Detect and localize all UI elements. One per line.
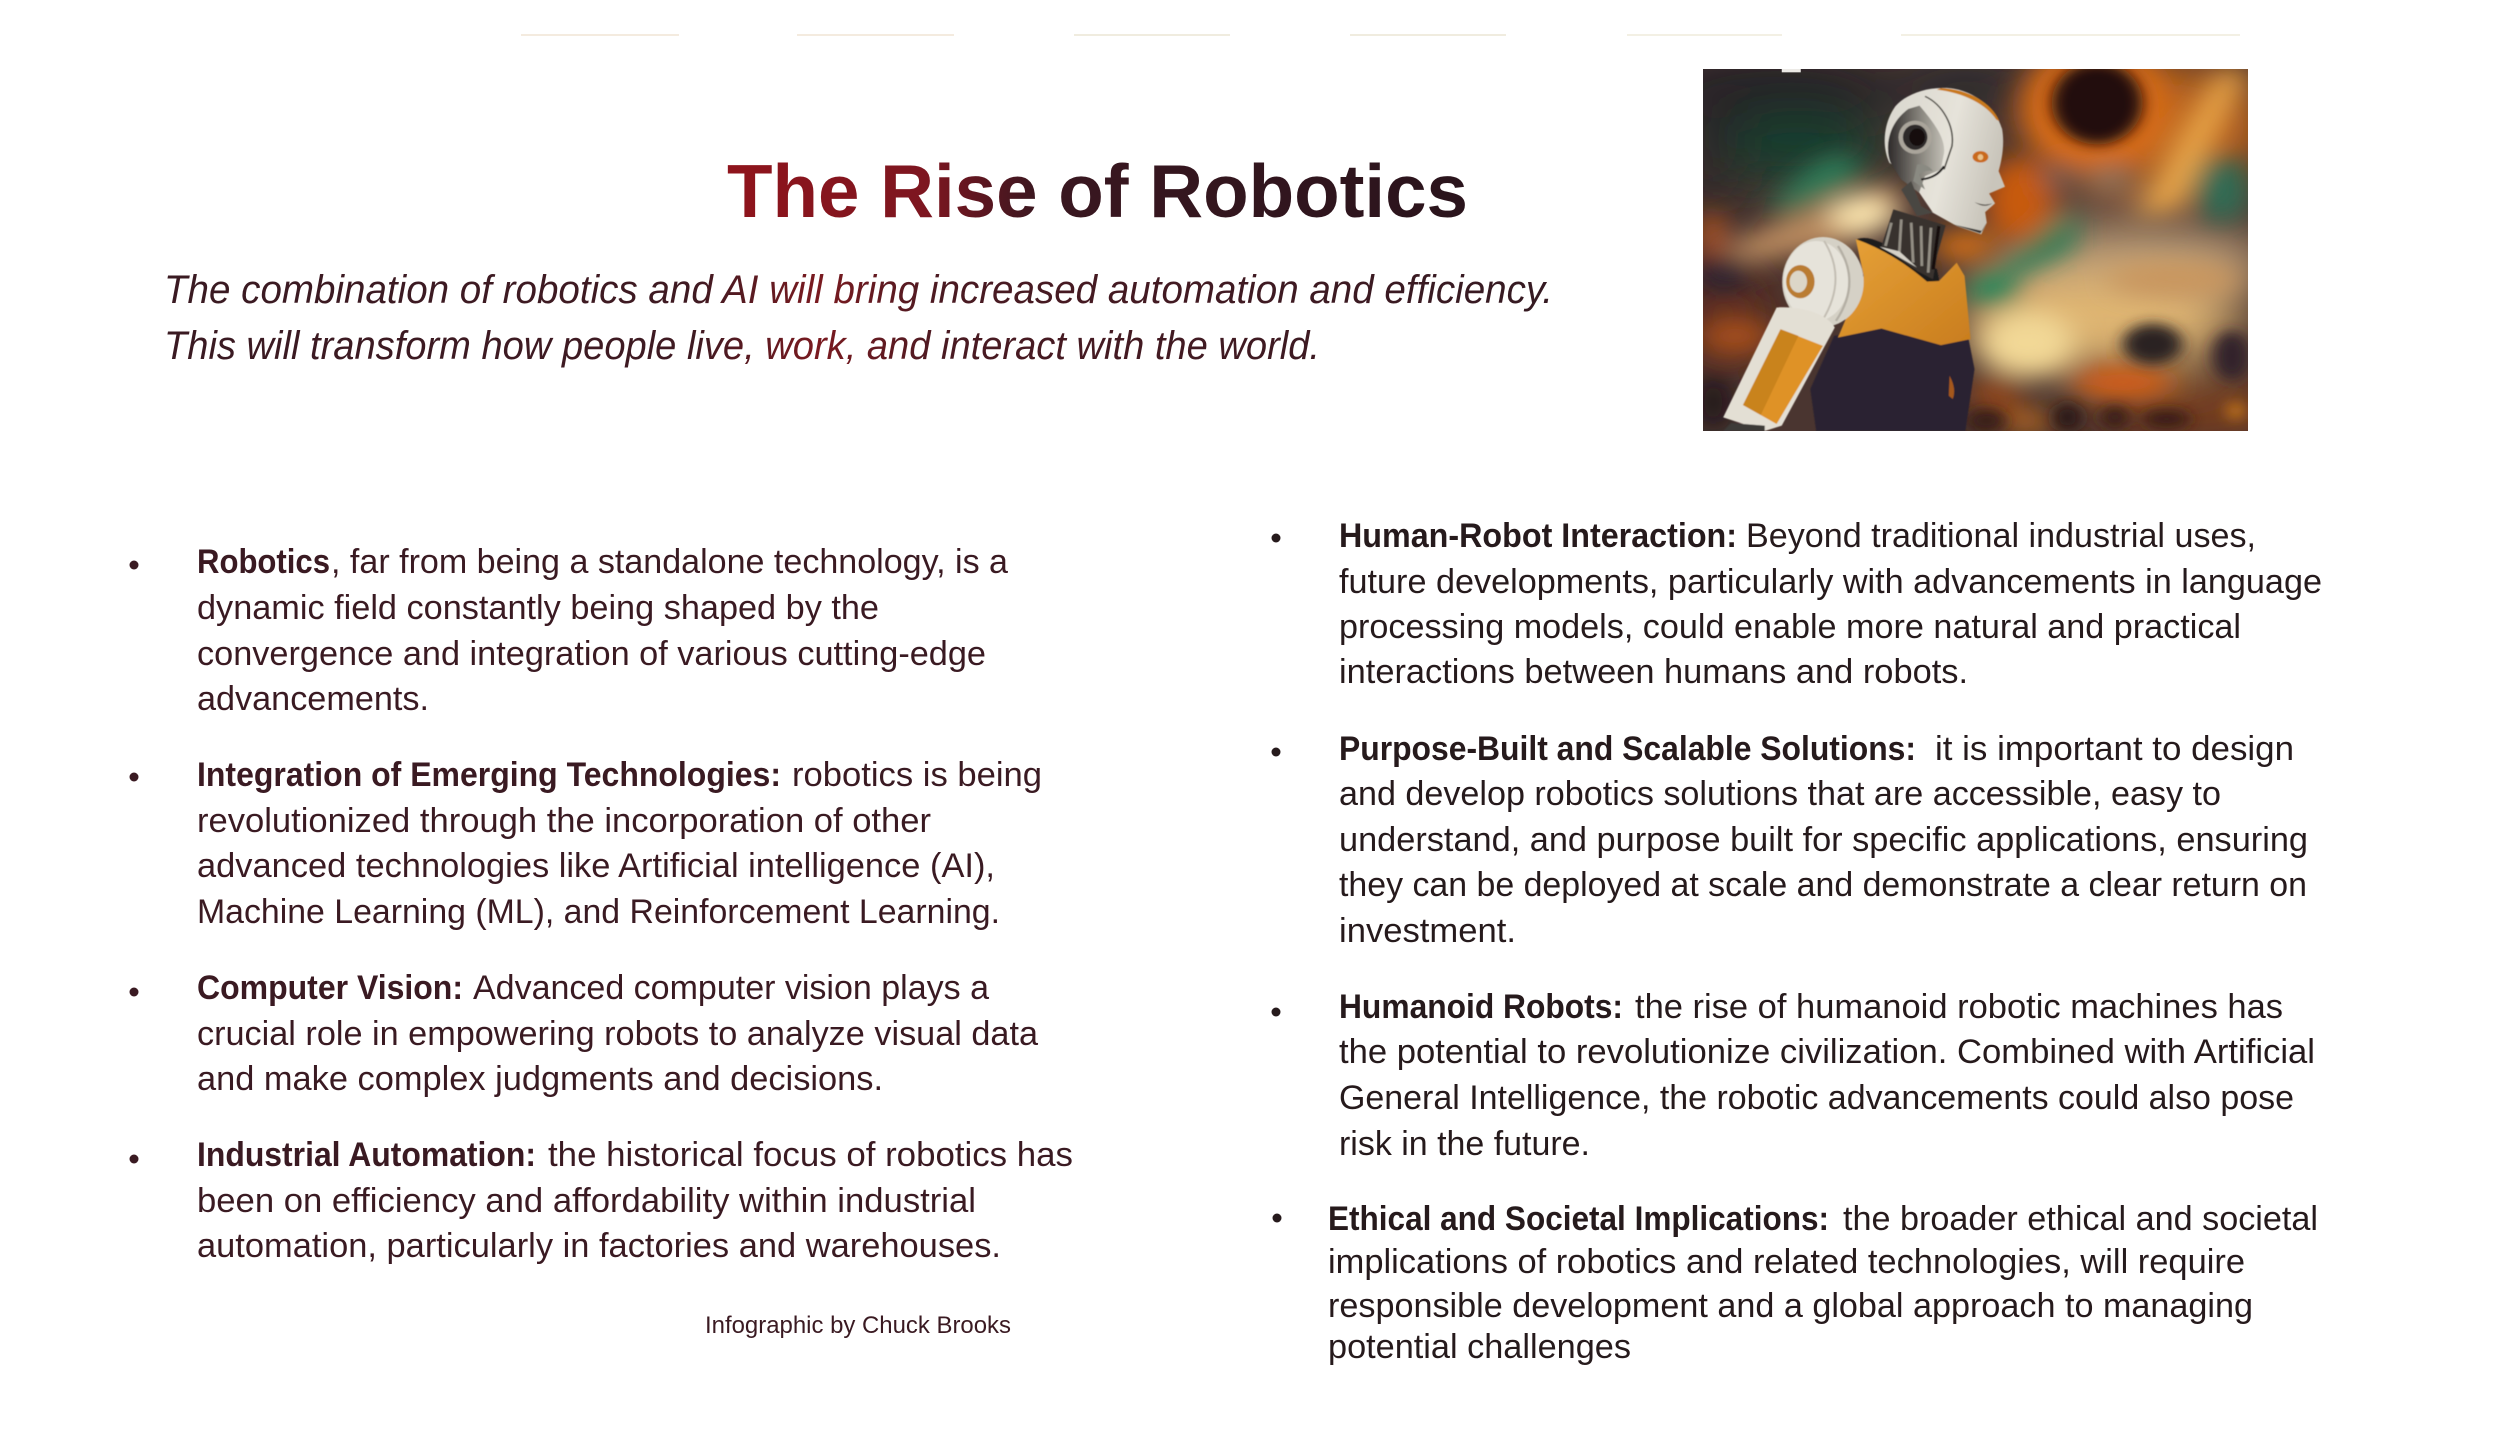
right bullet: Ethical and Societal Implications: the broader ethical and societal: [1843, 1200, 2318, 1238]
left bullet: Integration of Emerging Technologies: Machine Learning (ML), and Reinforcement Learning.: [197, 893, 1000, 931]
robot illustration: [1703, 69, 2248, 431]
right bullet: Ethical and Societal Implications: responsible development and a global approach to managing: [1328, 1287, 2253, 1325]
left bullet: Robotics: convergence and integration of various cutting-edge: [197, 635, 986, 673]
right bullet: Ethical and Societal Implications: potential challenges: [1328, 1328, 1631, 1366]
left bullet: Robotics: advancements.: [197, 680, 429, 718]
left bullet: Integration of Emerging Technologies: robotics is being: [792, 756, 1042, 794]
chest: [1838, 239, 1971, 345]
right bullet: Purpose-Built and Scalable Solutions: it is important to design: [1935, 730, 2294, 768]
left bullet: Industrial Automation: automation, particularly in factories and warehouses.: [197, 1227, 1001, 1265]
left bullet: Computer Vision: [130, 969, 1038, 1098]
right bullet: Purpose-Built and Scalable Solutions: investment.: [1339, 912, 1516, 950]
credit line: Infographic by Chuck Brooks: [705, 1312, 1011, 1339]
right bullet: Ethical and Societal Implications: [1272, 1200, 2318, 1366]
right bullet: Human-Robot Interaction: Beyond traditional industrial uses,: [1746, 517, 2256, 555]
left bullet: Computer Vision: Computer Vision:: [197, 969, 463, 1007]
right bullet: Humanoid Robots: General Intelligence, the robotic advancements could also pose: [1339, 1079, 2294, 1117]
neck: [1882, 209, 1946, 279]
subtitle: The combination of robotics and AI will bring increased automation and efficiency.: [164, 268, 1553, 312]
subtitle: [164, 268, 1553, 368]
left bullet: Computer Vision: crucial role in empowering robots to analyze visual data: [197, 1015, 1038, 1053]
right bullet: Humanoid Robots: [1272, 988, 2315, 1163]
left bullet: Robotics: , far from being a standalone technology, is a: [331, 543, 1008, 581]
left bullet: Robotics: Robotics: [197, 543, 330, 581]
left bullet: Integration of Emerging Technologies: [130, 756, 1042, 931]
right bullet: Humanoid Robots: Humanoid Robots:: [1339, 988, 1623, 1026]
left bullet: Computer Vision: and make complex judgments and decisions.: [197, 1060, 883, 1098]
left bullet: Integration of Emerging Technologies: revolutionized through the incorporation of other: [197, 802, 931, 840]
right bullet: Ethical and Societal Implications: Ethical and Societal Implications:: [1328, 1200, 1829, 1238]
right bullet: Humanoid Robots: the potential to revolutionize civilization. Combined with Artificial: [1339, 1033, 2315, 1071]
left bullet: Integration of Emerging Technologies: Integration of Emerging Technologies:: [197, 756, 781, 794]
left bullet: Industrial Automation: Industrial Automation:: [197, 1136, 536, 1174]
right bullet: Humanoid Robots: the rise of humanoid robotic machines has: [1635, 988, 2283, 1026]
right bullet: Purpose-Built and Scalable Solutions: they can be deployed at scale and demonstrate a clear return on: [1339, 866, 2307, 904]
title: The Rise of Robotics: [727, 149, 1468, 233]
scanning marks along the top edge: [521, 34, 2240, 36]
right bullet: Purpose-Built and Scalable Solutions: Purpose-Built and Scalable Solutions:: [1339, 730, 1916, 768]
right bullet: Human-Robot Interaction: future developments, particularly with advancements in language: [1339, 563, 2322, 601]
left bullet: Industrial Automation: the historical focus of robotics has: [548, 1136, 1073, 1174]
left bullet: Robotics: [130, 543, 1008, 718]
right bullet: Human-Robot Interaction: interactions between humans and robots.: [1339, 653, 1968, 691]
right bullet: Purpose-Built and Scalable Solutions: understand, and purpose built for specific applications, ensuring: [1339, 821, 2308, 859]
collar: [1857, 238, 1939, 282]
arm: [1723, 307, 1835, 431]
right bullet: Purpose-Built and Scalable Solutions: [1272, 730, 2308, 950]
left bullet: Industrial Automation: [130, 1136, 1073, 1265]
head: [1885, 88, 2005, 234]
right bullet: Humanoid Robots: risk in the future.: [1339, 1125, 1590, 1163]
left bullet: Robotics: dynamic field constantly being shaped by the: [197, 589, 879, 627]
torso: [1810, 329, 1975, 431]
right bullet: Human-Robot Interaction: [1272, 517, 2322, 691]
shoulder: [1782, 237, 1864, 327]
right bullet: Purpose-Built and Scalable Solutions: and develop robotics solutions that are accessible, easy to: [1339, 775, 2221, 813]
left bullet: Computer Vision: Advanced computer vision plays a: [473, 969, 989, 1007]
left bullet: Industrial Automation: been on efficiency and affordability within industrial: [197, 1182, 976, 1220]
subtitle: This will transform how people live, work, and interact with the world.: [164, 324, 1320, 368]
right bullet: Human-Robot Interaction: Human-Robot Interaction:: [1339, 517, 1737, 555]
right bullet: Ethical and Societal Implications: implications of robotics and related technologies, will require: [1328, 1243, 2245, 1281]
right bullet: Human-Robot Interaction: processing models, could enable more natural and practical: [1339, 608, 2241, 646]
left bullet: Integration of Emerging Technologies: advanced technologies like Artificial intelligence (AI),: [197, 847, 995, 885]
